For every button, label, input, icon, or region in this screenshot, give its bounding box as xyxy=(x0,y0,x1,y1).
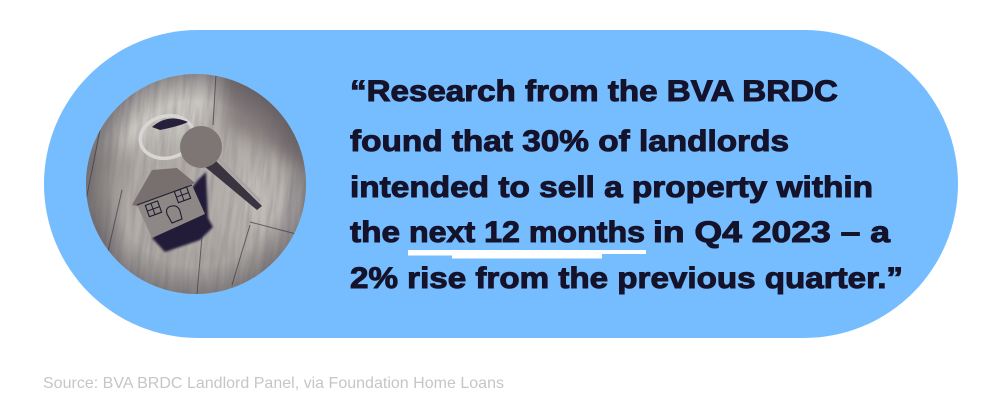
wood grain xyxy=(97,74,306,289)
quote text: 2% rise from the previous quarter.” xyxy=(350,262,903,295)
quote text: “Research from the BVA BRDC xyxy=(350,75,838,108)
house shadow xyxy=(152,172,213,252)
house charm xyxy=(132,168,205,238)
quote text: next 12 months xyxy=(409,216,645,249)
wood background xyxy=(86,74,306,294)
photo: house keyring on wood xyxy=(86,74,306,294)
key xyxy=(180,126,262,210)
highlight underline xyxy=(408,250,646,258)
quote text: in Q4 2023 – a xyxy=(653,216,890,249)
panel: blue quote pill xyxy=(44,30,958,338)
quote text: intended to sell a property within xyxy=(350,171,873,204)
infographic canvas xyxy=(44,30,958,390)
quote text: the xyxy=(350,216,400,249)
quote text: found that 30% of landlords xyxy=(350,125,789,158)
key ring xyxy=(138,114,194,160)
quote text xyxy=(350,75,903,295)
source note: Source: BVA BRDC Landlord Panel, via Foundation Home Loans xyxy=(43,375,504,392)
